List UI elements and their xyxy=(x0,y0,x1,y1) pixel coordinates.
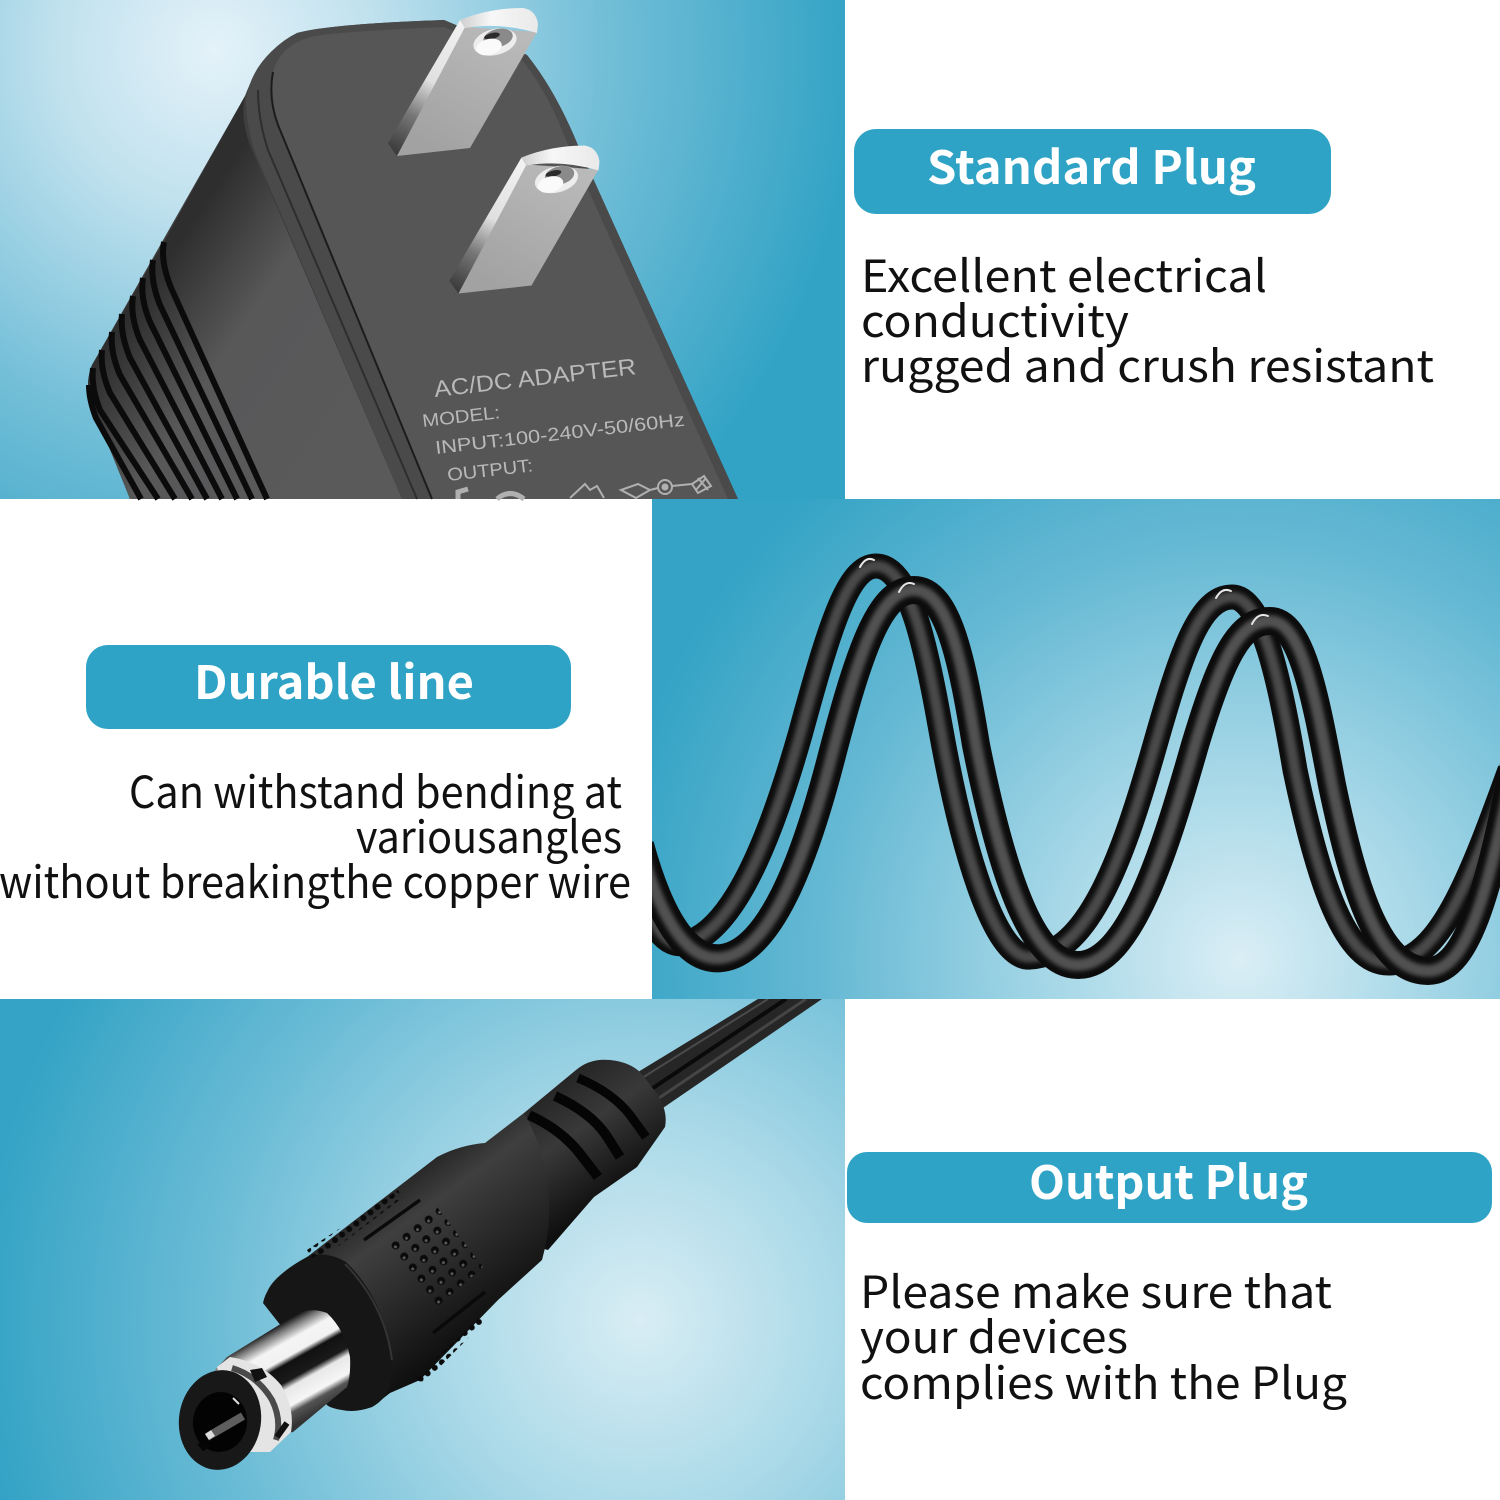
front cord xyxy=(640,590,1500,971)
text: Durable line description: variousangles xyxy=(356,802,622,866)
plug metal barrel xyxy=(215,1310,350,1440)
text: Output Plug description xyxy=(860,1257,1347,1412)
heading pill: Output Plug xyxy=(847,1147,1492,1223)
plug tip xyxy=(178,1370,262,1470)
text: Output Plug description: complies with the Plug xyxy=(860,1348,1347,1412)
heading pill: Durable line: Durable line xyxy=(194,647,474,713)
text: Durable line description: Can withstand bending at xyxy=(129,757,622,821)
prong 2 xyxy=(450,146,600,294)
text: Output Plug description: your devices xyxy=(860,1302,1128,1366)
plug front collar xyxy=(263,1254,392,1411)
panel: background top-left xyxy=(0,0,845,499)
text: Durable line description xyxy=(0,757,631,911)
illustration: wall adapter xyxy=(88,8,738,499)
illustration: coiled cable xyxy=(640,559,1500,971)
adapter polarity symbols xyxy=(458,476,711,499)
plug grip dots xyxy=(385,1207,483,1307)
plug metal ring xyxy=(217,1357,292,1452)
adapter body silhouette xyxy=(88,20,738,499)
plug twin cords xyxy=(638,999,822,1110)
illustration: DC output plug xyxy=(172,999,822,1475)
plug strain relief xyxy=(523,1060,666,1250)
text: Standard Plug description: rugged and crush resistant xyxy=(861,331,1434,395)
text: Output Plug description: Please make sure that xyxy=(860,1257,1332,1321)
text: Standard Plug description: conductivity xyxy=(861,286,1129,350)
section: Durable line xyxy=(0,645,631,911)
panel: background middle-right xyxy=(652,499,1500,999)
prong 1 xyxy=(388,8,538,156)
adapter bezel xyxy=(246,20,738,499)
plug main body xyxy=(268,1113,549,1411)
plug grip lines xyxy=(364,1200,485,1333)
heading pill: Durable line xyxy=(86,645,571,729)
heading pill: Output Plug: Output Plug xyxy=(1029,1147,1308,1213)
adapter ribs xyxy=(89,242,267,499)
adapter side face xyxy=(88,96,402,499)
heading pill: Standard Plug xyxy=(854,129,1331,214)
text: Durable line description: without breakingthe copper wire xyxy=(0,847,631,911)
adapter front face xyxy=(271,27,728,499)
adapter label: AC/DC ADAPTER: AC/DC ADAPTER xyxy=(433,353,637,402)
section: Standard Plug xyxy=(854,129,1434,395)
text: Standard Plug description xyxy=(861,241,1434,395)
back cord xyxy=(646,566,1500,963)
adapter label: MODEL: MODEL: xyxy=(421,402,501,431)
adapter label: OUTPUT: OUTPUT: xyxy=(446,455,534,485)
panel: background bottom-left xyxy=(0,999,845,1500)
adapter label: INPUT: INPUT:100-240V-50/60Hz xyxy=(434,409,686,458)
text: Standard Plug description: Excellent electrical xyxy=(861,241,1267,305)
cable highlights xyxy=(860,559,1268,624)
adapter bezel groove xyxy=(258,90,417,499)
heading pill: Standard Plug: Standard Plug xyxy=(927,132,1256,198)
section: Output Plug xyxy=(847,1147,1492,1412)
